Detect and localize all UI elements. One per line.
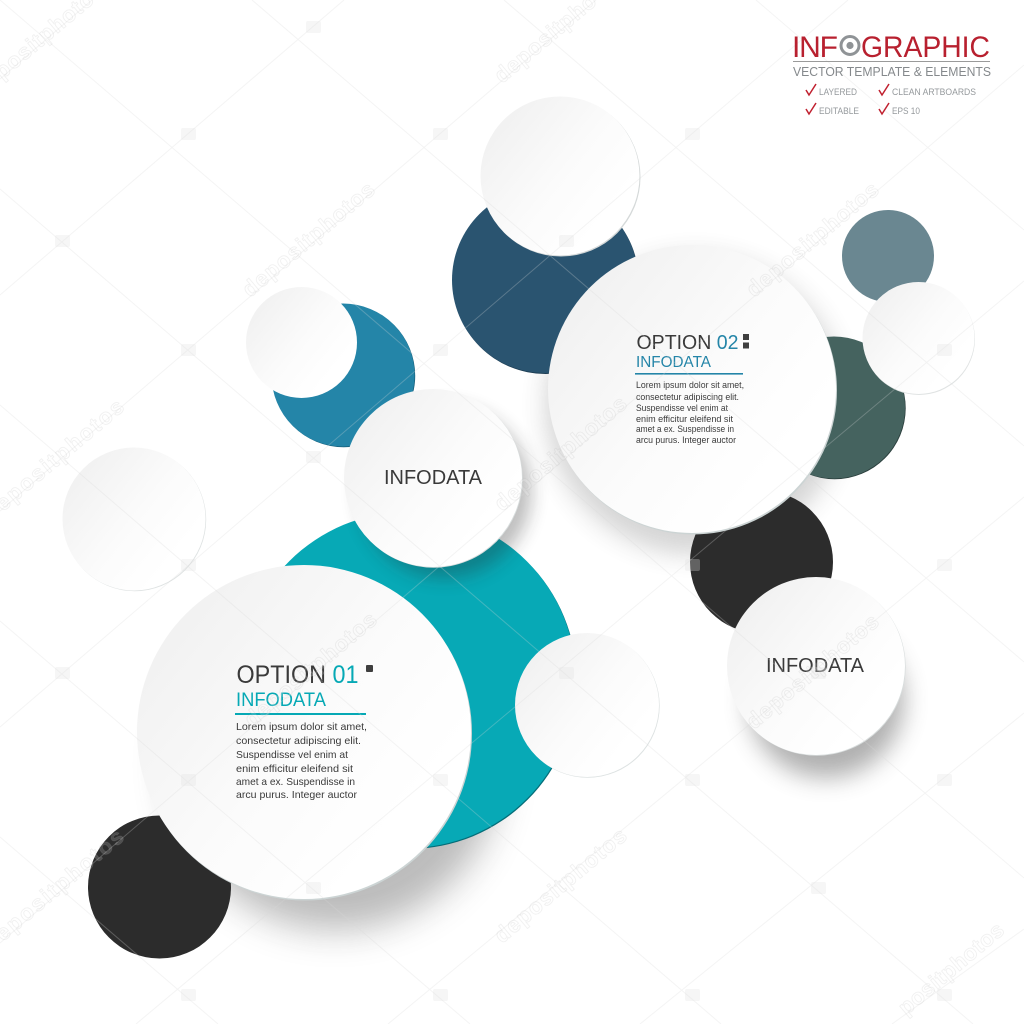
panel: option 01 — [137, 565, 472, 900]
option 01 rule — [235, 713, 366, 715]
panel: infodata circle centre — [344, 389, 523, 568]
option 01 body: consectetur adipiscing elit. — [236, 736, 361, 747]
circle: black lower left — [88, 816, 231, 958]
paper circle: right of teal — [515, 633, 660, 778]
paper circle: far left — [62, 448, 206, 591]
logo target icon — [841, 36, 859, 54]
logo: infographic — [792, 31, 991, 116]
panel: infodata circle centre: INFODATA — [384, 467, 483, 489]
watermark: depositphotos — [237, 177, 380, 302]
watermark: depositphotos — [489, 823, 632, 948]
paper circle: right small — [862, 282, 975, 395]
logo wordmark end: GRAPHIC — [861, 31, 990, 64]
logo checklist: EPS 10 — [892, 106, 920, 116]
watermark: depositphotos — [489, 391, 632, 516]
shadow: option 02 circle — [545, 255, 845, 555]
circle: blue — [272, 304, 415, 447]
option 01 body: arcu purus. Integer auctor — [236, 790, 358, 801]
option 01 body: amet a ex. Suspendisse in — [236, 777, 355, 788]
circle: black right — [690, 490, 833, 634]
option 02 body: Suspendisse vel enim at — [636, 403, 728, 413]
option 01 body: enim efficitur eleifend sit — [236, 764, 353, 775]
option 01 marker — [366, 665, 373, 672]
shadow: infodata centre circle — [359, 406, 531, 578]
shadow: option 01 circle — [170, 600, 500, 930]
watermark: depositphotos — [239, 607, 382, 732]
circle: slate — [842, 210, 934, 302]
logo checklist — [806, 84, 976, 116]
watermark: positphotos — [893, 917, 1009, 1020]
option 02 marker — [743, 334, 749, 348]
option 02 body — [636, 380, 744, 445]
panel: infodata circle lower right: INFODATA — [766, 655, 865, 677]
option 02 body: consectetur adipiscing elit. — [636, 392, 739, 402]
paper circle: blue companion — [246, 287, 357, 398]
option 01 body — [236, 722, 367, 801]
watermark: depositphotos — [741, 177, 884, 302]
option 01 subheading: INFODATA — [236, 690, 326, 711]
option 02 heading: OPTION 02 — [636, 331, 738, 354]
logo wordmark: INF — [792, 31, 838, 64]
shadow: infodata lower right — [748, 622, 904, 778]
option 02 body: arcu purus. Integer auctor — [636, 435, 736, 445]
option 02 rule — [635, 373, 743, 375]
circle: teal — [240, 512, 577, 849]
paper circle: top — [480, 96, 640, 256]
logo checklist: LAYERED — [819, 87, 857, 97]
option 02 subheading: INFODATA — [636, 354, 711, 371]
circle: navy — [452, 187, 639, 374]
option 02 body: enim efficitur eleifend sit — [636, 414, 733, 424]
option 01 body: Suspendisse vel enim at — [236, 750, 348, 761]
option 01 heading: OPTION 01 — [236, 661, 358, 689]
logo tagline: VECTOR TEMPLATE & ELEMENTS — [793, 64, 991, 79]
circle: dark green — [763, 336, 906, 479]
logo checklist: CLEAN ARTBOARDS — [892, 87, 976, 97]
logo checklist: EDITABLE — [819, 106, 859, 116]
option 02 body: Lorem ipsum dolor sit amet, — [636, 380, 744, 390]
panel: option 02 — [548, 245, 837, 534]
option 02 body: amet a ex. Suspendisse in — [636, 424, 734, 434]
panel: infodata circle lower right — [727, 577, 906, 756]
option 01 body: Lorem ipsum dolor sit amet, — [236, 722, 367, 733]
watermark: depositphotos — [741, 609, 884, 734]
